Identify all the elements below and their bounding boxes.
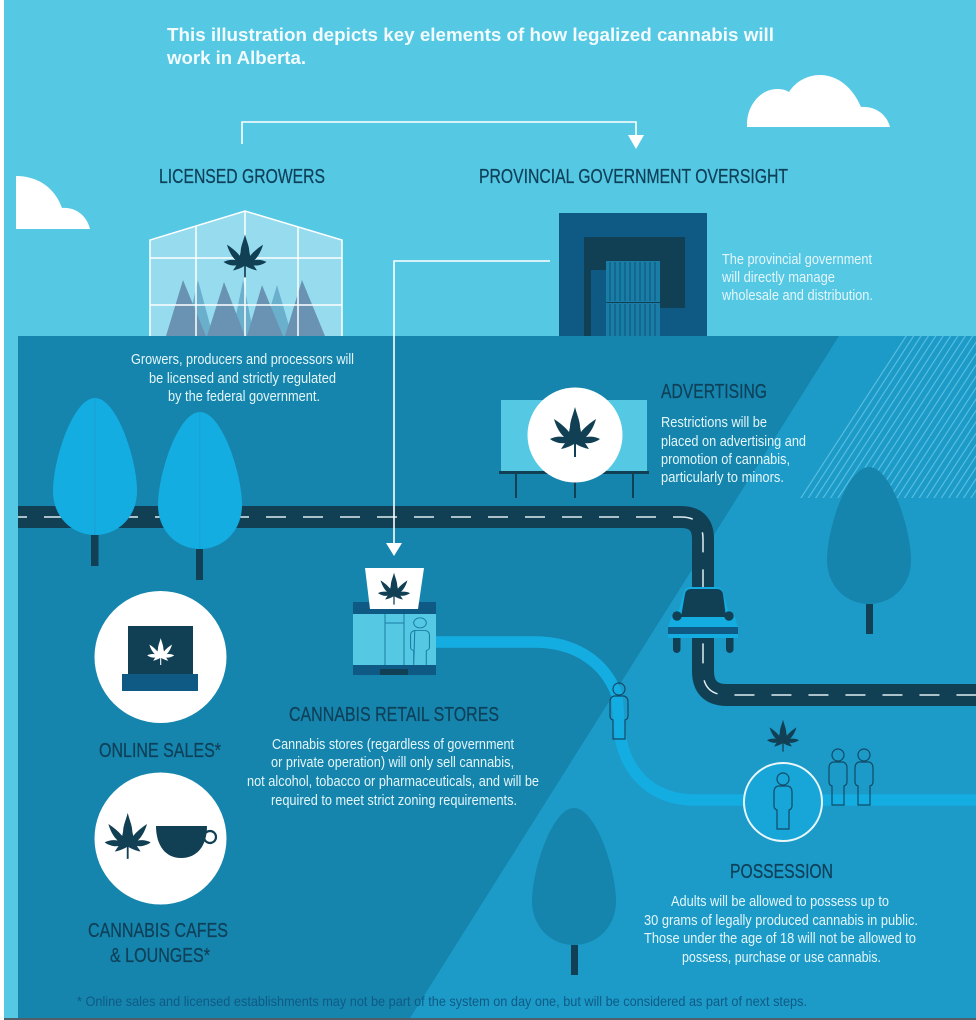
text: advertising: particularly to minors. (661, 470, 784, 486)
icon: online sales laptop (94, 591, 226, 723)
text: provincial government: The provincial government (722, 252, 872, 268)
icon: cloud right (747, 75, 890, 127)
icon: two people (829, 749, 873, 805)
heading: licensed growers: LICENSED GROWERS (159, 165, 325, 188)
text: advertising: promotion of cannabis, (661, 452, 790, 468)
heading: cafes and lounges (88, 919, 228, 967)
text: growers (131, 352, 354, 405)
heading: cafes and lounges: CANNABIS CAFES (88, 919, 228, 942)
heading: provincial oversight: PROVINCIAL GOVERNMENT OVERSIGHT (479, 165, 788, 188)
icon: billboard (499, 388, 649, 498)
text: advertising: Restrictions will be (661, 415, 767, 431)
text: growers: be licensed and strictly regulated (149, 371, 336, 387)
striped field (795, 336, 976, 498)
text: retail stores: not alcohol, tobacco or pharmaceuticals, and will be (247, 774, 539, 790)
heading: possession: POSSESSION (730, 860, 833, 883)
title (166, 24, 774, 68)
text: retail stores (247, 737, 539, 809)
icon: cloud left (16, 176, 90, 229)
text: growers: Growers, producers and processors will (131, 352, 354, 368)
text: advertising: placed on advertising and (661, 434, 806, 450)
road (18, 517, 976, 695)
heading: advertising: ADVERTISING (661, 380, 767, 403)
text: provincial government: wholesale and distribution. (721, 288, 873, 304)
text: retail stores: or private operation) will only sell cannabis, (271, 755, 514, 771)
text: possession: 30 grams of legally produced cannabis in public. (644, 913, 918, 929)
ground: dark zone (18, 336, 976, 1018)
tree 3 (827, 467, 911, 634)
heading: online sales: ONLINE SALES* (99, 739, 221, 762)
text: possession: Those under the age of 18 will not be allowed to (644, 931, 916, 947)
footnote: * Online sales and licensed establishments may not be part of the system on day one, but will be considered as part of next steps. (77, 993, 807, 1009)
walking path (436, 642, 976, 800)
heading: cafes and lounges: & LOUNGES* (110, 944, 210, 967)
icon: car (668, 587, 738, 653)
text: possession: possess, purchase or use cannabis. (682, 950, 881, 966)
tree 2 (158, 412, 242, 580)
tree 1 (53, 398, 137, 566)
text: possession (644, 894, 918, 966)
icon: greenhouse (150, 211, 342, 336)
text: advertising (661, 415, 806, 486)
bottom edge (4, 1018, 976, 1020)
text: growers: by the federal government. (168, 389, 320, 405)
text: provincial government (721, 252, 873, 304)
text: possession: Adults will be allowed to possess up to (671, 894, 889, 910)
text: retail stores: required to meet strict zoning requirements. (271, 793, 517, 809)
title: work in Alberta. (166, 47, 306, 68)
icon: person on path (610, 683, 628, 739)
icon: retail store (353, 568, 436, 675)
ground: light diagonal zone (410, 336, 976, 1018)
icon: possession circle with person (744, 763, 822, 841)
title: This illustration depicts key elements of how legalized cannabis will (167, 24, 774, 45)
icon: possession leaf (767, 720, 799, 752)
text: retail stores: Cannabis stores (regardless of government (272, 737, 514, 753)
text: provincial government: will directly manage (721, 270, 835, 286)
arrow: growers to oversight (242, 122, 644, 149)
tree 4 (532, 808, 616, 975)
arrow: oversight to retail (386, 261, 550, 556)
icon: cafes leaf and cup (94, 772, 226, 904)
heading: retail stores: CANNABIS RETAIL STORES (289, 703, 499, 726)
icon: warehouse (559, 213, 707, 336)
